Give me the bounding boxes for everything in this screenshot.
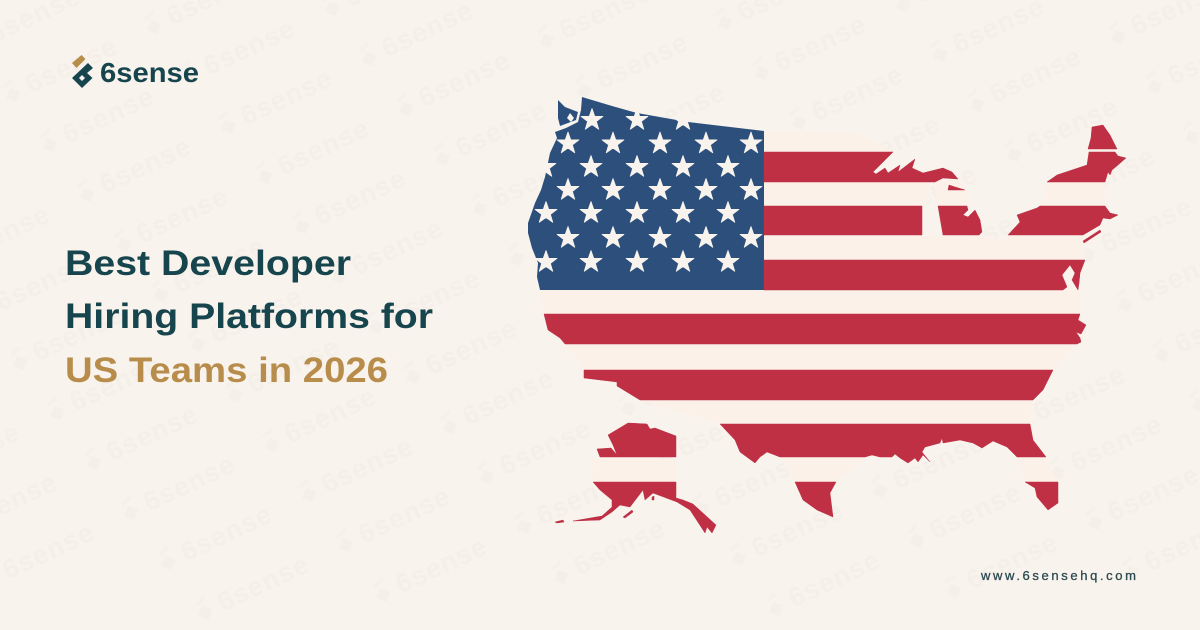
background watermark pattern: 6sense: [102, 399, 203, 467]
background watermark pattern: 6sense: [199, 13, 300, 81]
background watermark pattern: 6sense: [65, 349, 166, 417]
blue canton: [528, 97, 764, 290]
background watermark pattern: 6sense: [888, 427, 989, 495]
background watermark pattern: 6sense: [1029, 359, 1130, 427]
background watermark pattern: 6sense: [317, 431, 418, 499]
background watermark pattern: 6sense: [169, 231, 270, 299]
background watermark pattern: 6sense: [747, 495, 848, 563]
background watermark pattern: 6sense: [784, 545, 885, 613]
background watermark pattern: 6sense: [236, 63, 337, 131]
background watermark pattern: 6sense: [666, 127, 767, 195]
background watermark pattern: 6sense: [451, 95, 552, 163]
background watermark pattern: 6sense: [569, 513, 670, 581]
title: Hiring Platforms for: [65, 297, 433, 336]
background watermark pattern: 6sense: [925, 477, 1026, 545]
background watermark pattern: 6sense: [414, 45, 515, 113]
background watermark pattern: 6sense: [495, 413, 596, 481]
background watermark pattern: 6sense: [777, 277, 878, 345]
cream stripes of the map: [540, 131, 1105, 482]
background watermark pattern: 6sense: [525, 195, 626, 263]
background watermark pattern: 6sense: [636, 345, 737, 413]
background watermark pattern: 6sense: [213, 549, 314, 617]
background watermark pattern: 6sense: [176, 499, 277, 567]
background watermark pattern: 6sense: [962, 527, 1063, 595]
background watermark pattern: 6sense: [58, 81, 159, 149]
background watermark pattern: 6sense: [139, 449, 240, 517]
background watermark pattern: 6sense: [1059, 141, 1160, 209]
background watermark pattern: 6sense: [384, 263, 485, 331]
background watermark pattern: 6sense: [703, 177, 804, 245]
white stars: [534, 108, 762, 271]
logo wordmark: 6sense: [100, 57, 199, 88]
title: [65, 244, 433, 390]
website url: www.6sensehq.com: [980, 568, 1136, 583]
red stripes of the map: [544, 125, 1126, 533]
background watermark pattern: 6sense: [807, 59, 908, 127]
background watermark pattern: 6sense: [629, 77, 730, 145]
background watermark pattern: 6sense: [599, 295, 700, 363]
background watermark pattern: 6sense: [273, 113, 374, 181]
logo: 6sense: [72, 55, 199, 88]
background watermark pattern: 6sense: [243, 331, 344, 399]
background watermark pattern: 6sense: [0, 517, 99, 585]
background watermark pattern: 6sense: [1066, 409, 1167, 477]
map: US flag map: [528, 97, 1126, 533]
title: US Teams in 2026: [65, 351, 388, 390]
background watermark pattern: 6sense: [851, 377, 952, 445]
background watermark pattern: 6sense: [918, 209, 1019, 277]
background watermark pattern: 6sense: [881, 159, 982, 227]
background watermark pattern: 6sense: [844, 109, 945, 177]
background watermark pattern: 6sense: [132, 181, 233, 249]
background watermark pattern: 6sense: [421, 313, 522, 381]
background watermark pattern: 6sense: [992, 309, 1093, 377]
background watermark pattern: 6sense: [354, 481, 455, 549]
background watermark pattern: 6sense: [770, 9, 871, 77]
background watermark pattern: 6sense: [310, 163, 411, 231]
background watermark pattern: 6sense: [985, 41, 1086, 109]
background watermark pattern: 6sense: [391, 531, 492, 599]
background watermark pattern: 6sense: [814, 327, 915, 395]
background watermark pattern: 6sense: [592, 27, 693, 95]
background watermark pattern: 6sense: [710, 445, 811, 513]
background watermark pattern: 6sense: [740, 227, 841, 295]
background watermark pattern: 6sense: [955, 259, 1056, 327]
background watermark pattern: 6sense: [488, 145, 589, 213]
background watermark pattern: 6sense: [532, 463, 633, 531]
background watermark pattern: 6sense: [673, 395, 774, 463]
background watermark pattern: 6sense: [95, 131, 196, 199]
background watermark pattern: 6sense: [280, 381, 381, 449]
background watermark pattern: 6sense: [28, 299, 129, 367]
background watermark pattern: 6sense: [1022, 91, 1123, 159]
title: Best Developer: [65, 244, 351, 283]
background watermark pattern: 6sense: [21, 31, 122, 99]
background watermark pattern: 6sense: [206, 281, 307, 349]
icon: logo mark: [72, 55, 93, 88]
background watermark pattern: 6sense: [458, 363, 559, 431]
background watermark pattern: 6sense: [347, 213, 448, 281]
background watermark pattern: 6sense: [1096, 191, 1197, 259]
background watermark pattern: 6sense: [562, 245, 663, 313]
